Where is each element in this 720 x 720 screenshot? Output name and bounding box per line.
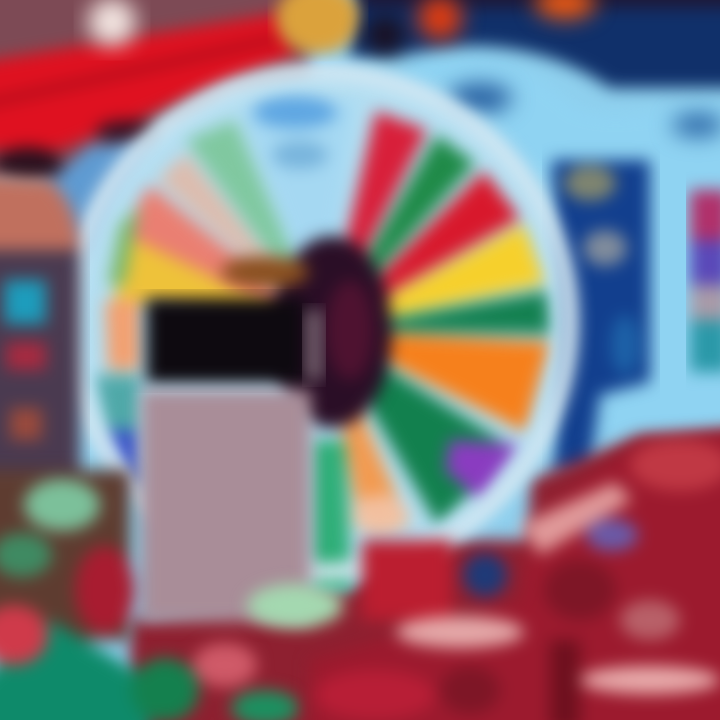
wheel	[70, 72, 570, 590]
wheel hub	[221, 236, 392, 428]
pillar: black display top	[146, 298, 304, 384]
panel: right dark blue board	[552, 160, 650, 475]
bottom backdrop: red chip field	[130, 430, 720, 720]
panel: far right colour board	[690, 190, 720, 372]
bottom left floor and chips	[0, 470, 299, 720]
ceiling lamp	[88, 0, 136, 46]
light blue arch wall	[50, 56, 720, 460]
background: casino ceiling and walls	[0, 0, 720, 460]
wheel face	[75, 72, 565, 572]
pillar: grey body	[141, 390, 311, 622]
blue left wall	[40, 145, 160, 260]
left slot machine tower	[0, 175, 80, 490]
pillar: grey side strip	[304, 310, 324, 380]
wheel segments	[95, 96, 550, 590]
red ceiling stripes	[0, 12, 295, 150]
wheel outer ring	[70, 72, 570, 572]
golden ball	[276, 0, 360, 54]
dark arch shadow under ceiling	[0, 120, 160, 183]
orange lights	[365, 0, 720, 137]
navy upper wall	[350, 0, 720, 88]
bottom right red chips	[247, 430, 720, 720]
